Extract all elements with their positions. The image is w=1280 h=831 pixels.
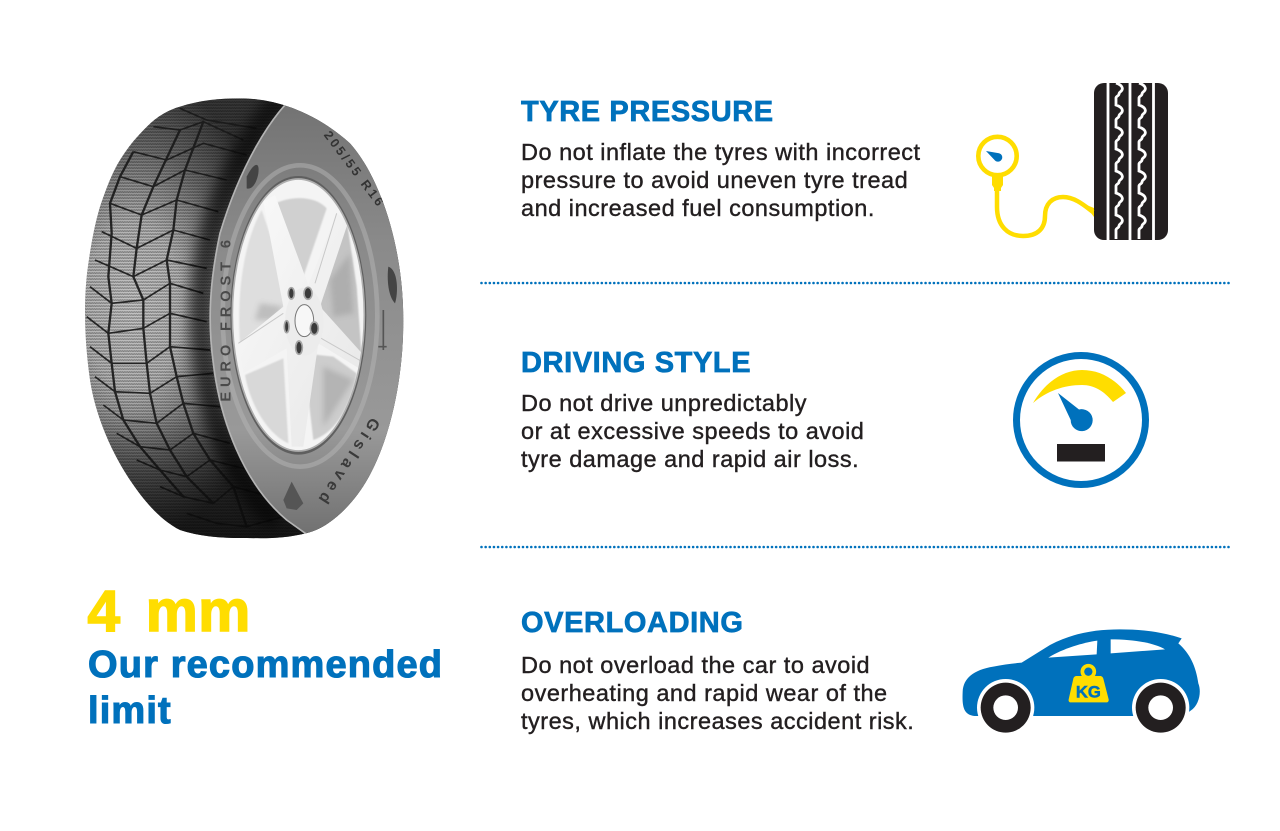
front wheel xyxy=(977,679,1034,736)
icon: gauge dial xyxy=(978,137,1017,191)
text: driving style xyxy=(521,390,864,472)
car body xyxy=(963,629,1200,716)
shadow next to the sidewall xyxy=(201,93,287,520)
text: overloading: tyres, which increases accident risk. xyxy=(521,708,914,734)
subheading: our recommended limit: Our recommended xyxy=(88,644,443,686)
big number: 4 mm: 4 mm xyxy=(88,579,251,644)
rear wheel xyxy=(1132,679,1189,736)
spokes xyxy=(238,195,365,447)
icon: gauge hose xyxy=(997,186,1093,236)
illustration: winter tyre with alloy wheel xyxy=(85,98,404,538)
dark bead around rim xyxy=(230,176,366,455)
text: overloading: overheating and rapid wear of the xyxy=(521,680,888,706)
heading: overloading: OVERLOADING xyxy=(521,607,744,639)
hub and lug nuts xyxy=(285,288,324,356)
sidewall xyxy=(211,106,404,534)
icon: pressure gauge connected to tyre xyxy=(976,83,1168,240)
weight xyxy=(1069,666,1109,702)
text: driving style: tyre damage and rapid air loss. xyxy=(521,446,859,472)
icon: speedometer xyxy=(1013,352,1149,488)
windows xyxy=(1048,641,1097,658)
sidewall markings: EURO FROST 6 xyxy=(219,240,235,402)
grooves xyxy=(87,108,283,527)
subheading: our recommended limit xyxy=(88,644,443,732)
icon: hose connector xyxy=(1084,204,1094,217)
wheel pockets xyxy=(239,198,362,443)
rim xyxy=(232,179,364,451)
weight: KG xyxy=(1076,682,1101,701)
text: tyre pressure: Do not inflate the tyres with incorrect xyxy=(521,139,921,165)
subheading: our recommended limit: limit xyxy=(88,690,172,732)
text: overloading xyxy=(521,652,914,734)
text: overloading: Do not overload the car to avoid xyxy=(521,652,870,678)
illustration: winter tyre with alloy wheel: 205/55 R16 xyxy=(321,128,386,209)
illustration: winter tyre with alloy wheel: Gislaved xyxy=(315,414,383,506)
text: driving style: or at excessive speeds to avoid xyxy=(521,418,864,444)
text: tyre pressure: and increased fuel consumption. xyxy=(521,195,875,221)
text: driving style: Do not drive unpredictably xyxy=(521,390,807,416)
icon: tyre tread xyxy=(1094,83,1168,240)
heading: tyre pressure: TYRE PRESSURE xyxy=(521,96,774,128)
heading: driving style: DRIVING STYLE xyxy=(521,347,751,379)
text: tyre pressure xyxy=(521,139,921,222)
text: tyre pressure: pressure to avoid uneven tyre tread xyxy=(521,167,908,193)
